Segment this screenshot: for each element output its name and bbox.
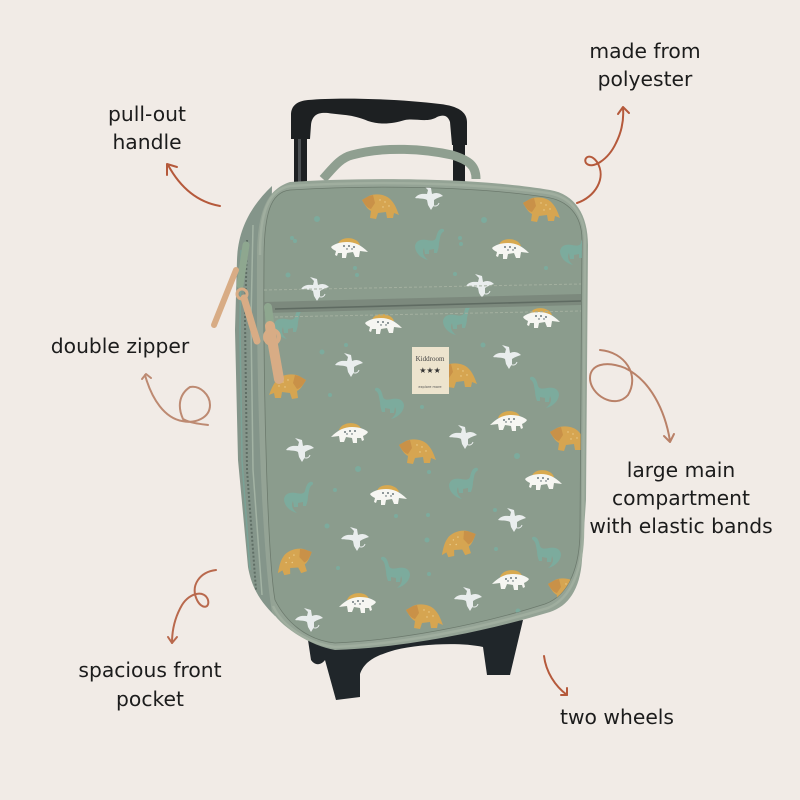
label: pull-out handle: handle [112, 130, 182, 154]
front shell [257, 179, 588, 650]
front panel [264, 187, 582, 643]
brand label: ★★★ [419, 366, 441, 375]
small dots [286, 216, 548, 614]
brand label [412, 347, 449, 394]
suitcase [214, 99, 589, 700]
side zipper [240, 225, 262, 595]
arrow: polyester [577, 107, 629, 203]
arrow: main compartment [590, 350, 674, 442]
label: spacious front pocket: spacious front [78, 658, 222, 682]
brontosaurus prints [274, 229, 589, 588]
arrow: pull-out handle [167, 164, 220, 206]
zipper pulls [214, 245, 279, 379]
wheels and legs [308, 620, 523, 700]
front pocket zipper [264, 284, 581, 317]
label: made from polyester: made from [589, 39, 701, 63]
triceratops prints [269, 194, 587, 629]
label: pull-out handle: pull-out [108, 102, 186, 126]
carry handle [323, 149, 476, 179]
arrow: two wheels [544, 656, 567, 695]
brand label: Kiddroom [416, 355, 445, 363]
pterodactyl prints [286, 186, 526, 632]
label: two wheels: two wheels [560, 705, 674, 729]
label: double zipper: double zipper [51, 334, 190, 358]
label: spacious front pocket: pocket [116, 687, 184, 711]
zipper piping [260, 183, 585, 647]
telescopic handle [291, 99, 467, 190]
stegosaurus prints [331, 238, 562, 613]
dinosaur print [269, 186, 589, 632]
arrow: front pocket [168, 570, 216, 643]
label: made from polyester: polyester [598, 67, 693, 91]
brand label: explore more [418, 385, 442, 389]
arrow: double zipper [142, 374, 210, 425]
label: large main compartment: with elastic bands [589, 514, 773, 538]
label: large main compartment: large main [627, 458, 735, 482]
label: large main compartment: compartment [612, 486, 750, 510]
side gusset [235, 186, 285, 616]
